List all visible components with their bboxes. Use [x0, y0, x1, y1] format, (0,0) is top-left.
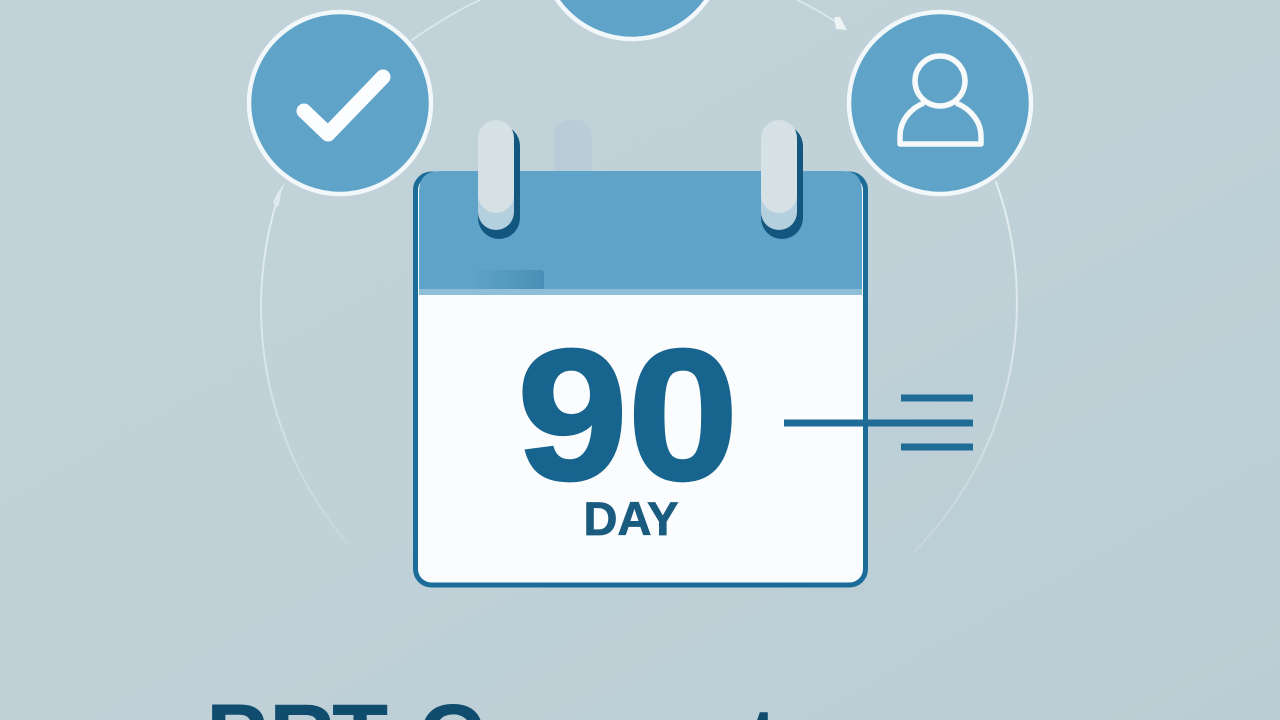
person body	[900, 103, 981, 144]
number 90: 0	[628, 311, 738, 519]
number 90	[517, 311, 738, 519]
number 90: 9	[517, 311, 628, 519]
ghost ring	[554, 120, 592, 200]
DAY label: DAY	[584, 492, 678, 545]
timeline lines	[784, 394, 973, 450]
icon: person circle	[849, 12, 1031, 194]
left binding ring	[478, 120, 520, 239]
header tab	[470, 270, 544, 289]
check mark	[304, 77, 383, 134]
orbit arcs	[261, 0, 1017, 551]
right binding ring	[761, 120, 803, 239]
calendar	[416, 120, 866, 585]
person head	[915, 56, 965, 106]
icon: top circle	[541, 0, 723, 39]
icon: check circle	[249, 12, 431, 194]
header strip	[419, 289, 862, 295]
calendar body	[416, 174, 866, 585]
calendar header	[419, 171, 862, 289]
